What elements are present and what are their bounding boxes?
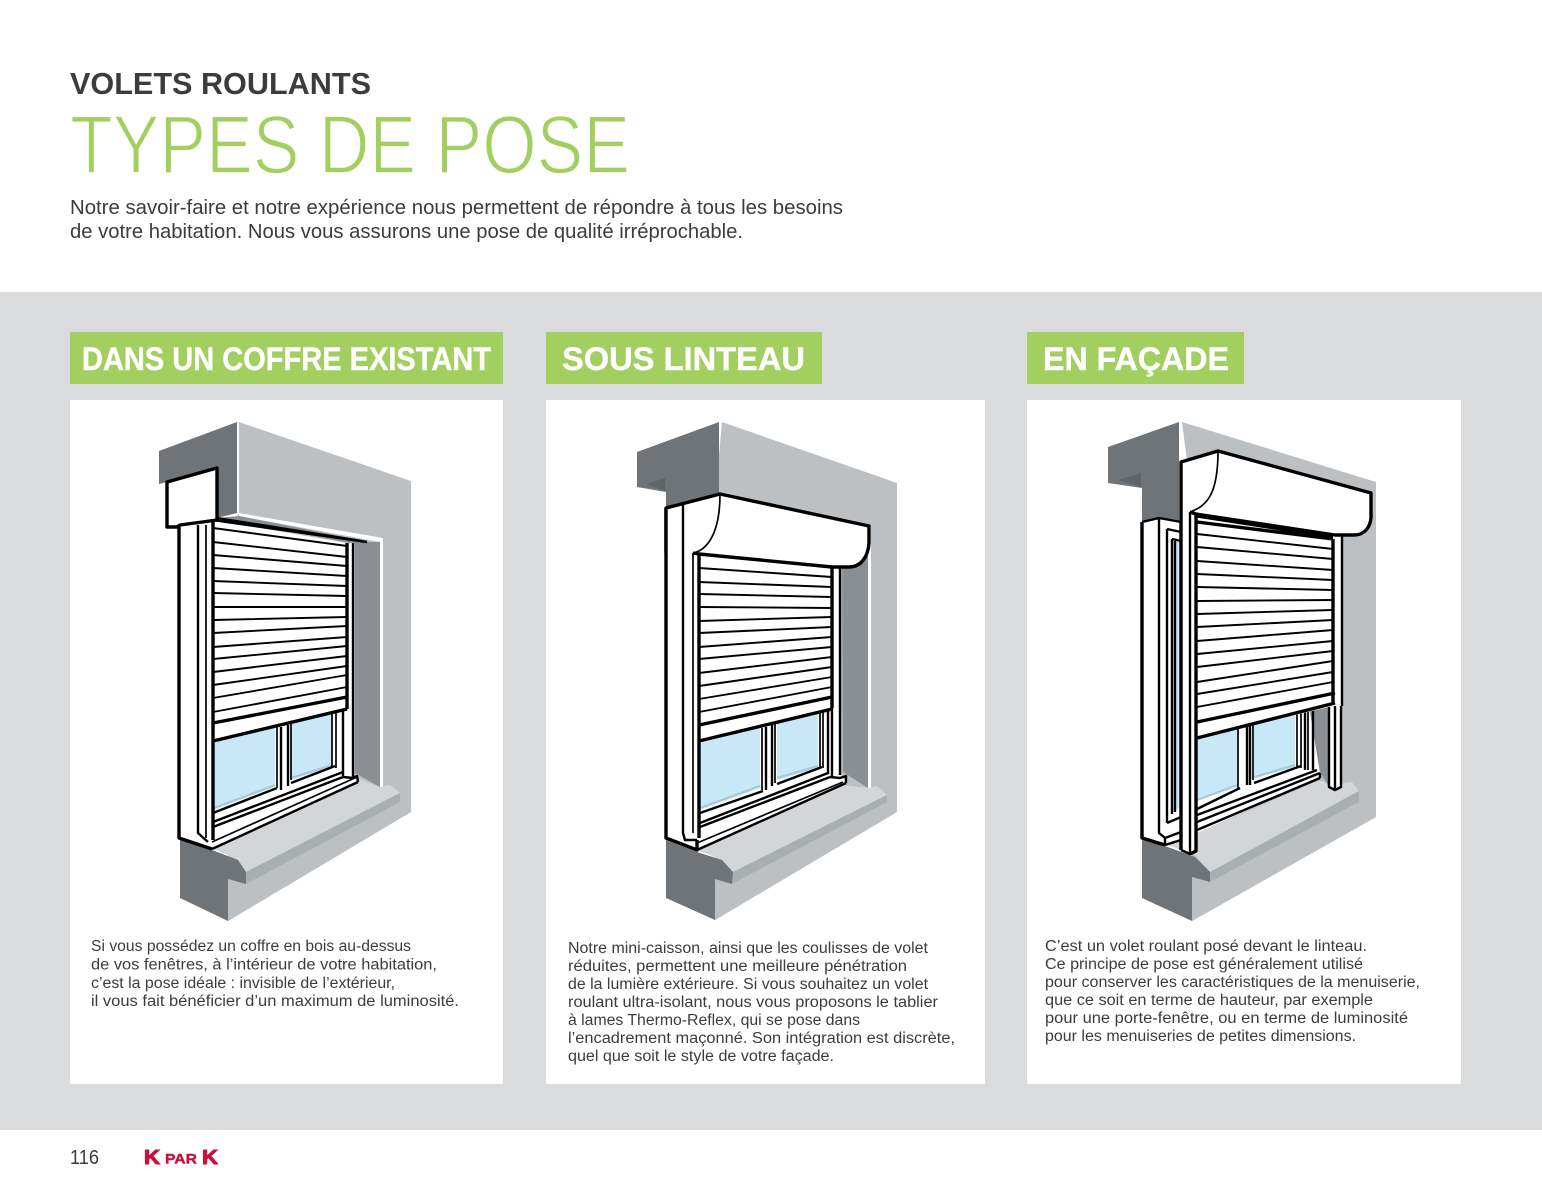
description: en facade: pour une porte-fenêtre, ou en terme de luminosité bbox=[1045, 1010, 1408, 1027]
shutter slats bbox=[1197, 510, 1350, 738]
window frame bbox=[666, 508, 846, 850]
heading: volets roulants: VOLETS ROULANTS bbox=[70, 66, 371, 101]
panel: en facade bbox=[1027, 400, 1461, 1084]
back frame bbox=[1142, 518, 1181, 845]
column: sous linteau bbox=[546, 332, 985, 1084]
page number: 116 bbox=[70, 1147, 99, 1169]
column: dans un coffre existant bbox=[70, 332, 503, 1084]
existing box bbox=[167, 468, 217, 527]
description: sous linteau: Notre mini-caisson, ainsi que les coulisses de volet bbox=[568, 940, 929, 957]
window frame bbox=[1197, 700, 1320, 833]
description: en facade: C’est un volet roulant posé devant le linteau. bbox=[1045, 938, 1367, 955]
description: en facade: que ce soit en terme de hauteur, par exemple bbox=[1045, 992, 1373, 1009]
panel: coffre existant bbox=[70, 400, 503, 1084]
front box and rail bbox=[1181, 451, 1371, 854]
title: types de pose: TYPES DE POSE bbox=[70, 98, 630, 191]
left guide rail bbox=[179, 525, 212, 849]
description: coffre existant: Si vous possédez un coffre en bois au-dessus bbox=[91, 938, 411, 955]
shutter slats bbox=[699, 553, 832, 838]
description: sous linteau: l’encadrement maçonné. Son intégration est discrète, bbox=[568, 1030, 955, 1047]
description: coffre existant: il vous fait bénéficier d’un maximum de luminosité. bbox=[91, 993, 459, 1010]
description: en facade: pour les menuiseries de petites dimensions. bbox=[1045, 1028, 1356, 1045]
mini box bbox=[666, 494, 869, 567]
description: sous linteau: roulant ultra-isolant, nous vous proposons le tablier bbox=[568, 994, 938, 1011]
banner: sous linteau bbox=[546, 332, 822, 384]
banner: en facade bbox=[1027, 332, 1244, 384]
description: sous linteau: réduites, permettent une meilleure pénétration bbox=[568, 958, 907, 975]
shutter slats bbox=[213, 518, 367, 840]
panel: sous linteau bbox=[546, 400, 985, 1084]
logo: k par k: K bbox=[202, 1147, 219, 1169]
side rail bbox=[666, 508, 697, 850]
intro text: de votre habitation. Nous vous assurons une pose de qualité irréprochable. bbox=[70, 221, 743, 243]
description: en facade: Ce principe de pose est généralement utilisé bbox=[1045, 956, 1363, 973]
logo: k par k: PAR bbox=[165, 1150, 197, 1166]
column: en facade bbox=[1027, 332, 1461, 1084]
title block bbox=[70, 66, 843, 243]
illustration: volet en facade bbox=[1108, 422, 1376, 921]
banner: en facade: EN FAÇADE bbox=[1043, 341, 1229, 377]
description: en facade: pour conserver les caractéristiques de la menuiserie, bbox=[1045, 974, 1420, 991]
description: coffre existant: c’est la pose idéale : invisible de l’extérieur, bbox=[91, 975, 395, 992]
banner: dans un coffre existant: DANS UN COFFRE EXISTANT bbox=[82, 341, 491, 377]
illustration: volet dans coffre existant bbox=[159, 422, 411, 921]
description: coffre existant: de vos fenêtres, à l’intérieur de votre habitation, bbox=[91, 956, 437, 974]
window frame bbox=[179, 520, 358, 849]
intro text: Notre savoir-faire et notre expérience nous permettent de répondre à tous les besoins bbox=[70, 197, 843, 219]
description: sous linteau: à lames Thermo-Reflex, qui se pose dans bbox=[568, 1012, 860, 1029]
description: sous linteau: quel que soit le style de votre façade. bbox=[568, 1048, 834, 1065]
logo: k par k bbox=[144, 1147, 219, 1169]
logo: k par k: K bbox=[144, 1147, 161, 1169]
description: sous linteau: de la lumière extérieure. Si vous souhaitez un volet bbox=[568, 976, 929, 993]
illustration: volet sous linteau bbox=[637, 422, 897, 920]
banner: dans un coffre existant bbox=[70, 332, 503, 384]
right rail bbox=[1329, 700, 1342, 790]
banner: sous linteau: SOUS LINTEAU bbox=[562, 341, 805, 377]
